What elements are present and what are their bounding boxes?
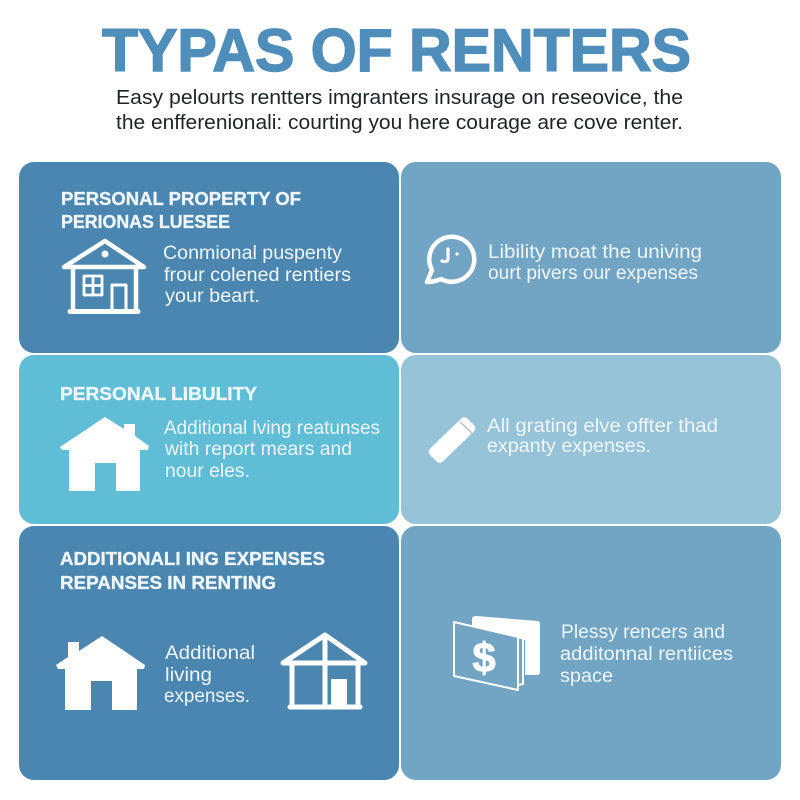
text: additional living description [164,643,255,707]
panel: liability [401,162,781,353]
text: personal property description [163,243,351,307]
text: additional living description: expenses. [164,686,250,707]
heading: personal liability: PERSONAL LIBULITY [60,384,257,404]
icon: dollar bills [454,616,540,690]
panel: personal liability [19,355,399,524]
text: personal liability description [164,418,380,482]
heading: personal property: PERIONAS LUESEE [61,212,230,232]
text: all grating description: All grating elve offter thad [487,416,718,437]
text: personal property description: Conmional puspenty [163,243,343,264]
subtitle: the enfferenionali: courting you here courage are cove renter. [116,112,683,134]
panel: plessy rencers [401,526,781,780]
icon: outlined house with window [64,241,144,312]
heading: additional expenses: REPANSES IN RENTING [60,573,276,593]
text: personal liability description: Additional lving reatunses [164,418,380,439]
text: plessy rencers description: Plessy rencers and [561,622,725,643]
text: personal liability description: with report mears and [164,439,352,460]
text: plessy rencers description: space [560,666,613,687]
text: liability description: Libility moat the univing [488,242,702,263]
heading: additional expenses [60,549,325,593]
text: liability description: ourt pivers our expenses [488,263,698,284]
text: personal property description: your beart. [165,286,260,307]
text: plessy rencers description [560,622,733,687]
icon: outlined house frame [283,635,365,707]
text: personal property description: frour colened rentiers [164,265,351,286]
text: all grating description: expanty expenses. [487,436,651,457]
heading: personal property [61,189,301,232]
icon: dollar bills: $ [472,634,496,681]
icon: solid house [60,417,149,491]
title: TYPAS OF RENTERS [102,17,691,84]
icon: pill-shaped eraser [427,415,477,465]
text: all grating description [487,416,718,457]
text: liability description [488,242,702,284]
subtitle [116,87,683,134]
text: plessy rencers description: additonnal rentiices [560,644,733,665]
icon: solid house left [56,636,145,710]
heading: personal property: PERSONAL PROPERTY OF [61,189,301,209]
text: personal liability description: nour eles. [165,461,250,482]
heading: additional expenses: ADDITIONALI ING EXPENSES [60,549,325,569]
text: additional living description: Additional [165,643,255,664]
panel: all grating [401,355,781,524]
icon: speech bubble [427,237,474,282]
text: additional living description: living [165,665,212,686]
panel: personal property [19,162,399,353]
panel: additional living expenses [19,526,399,780]
subtitle: Easy pelourts rentters imgranters insurage on reseovice, the [116,87,683,109]
